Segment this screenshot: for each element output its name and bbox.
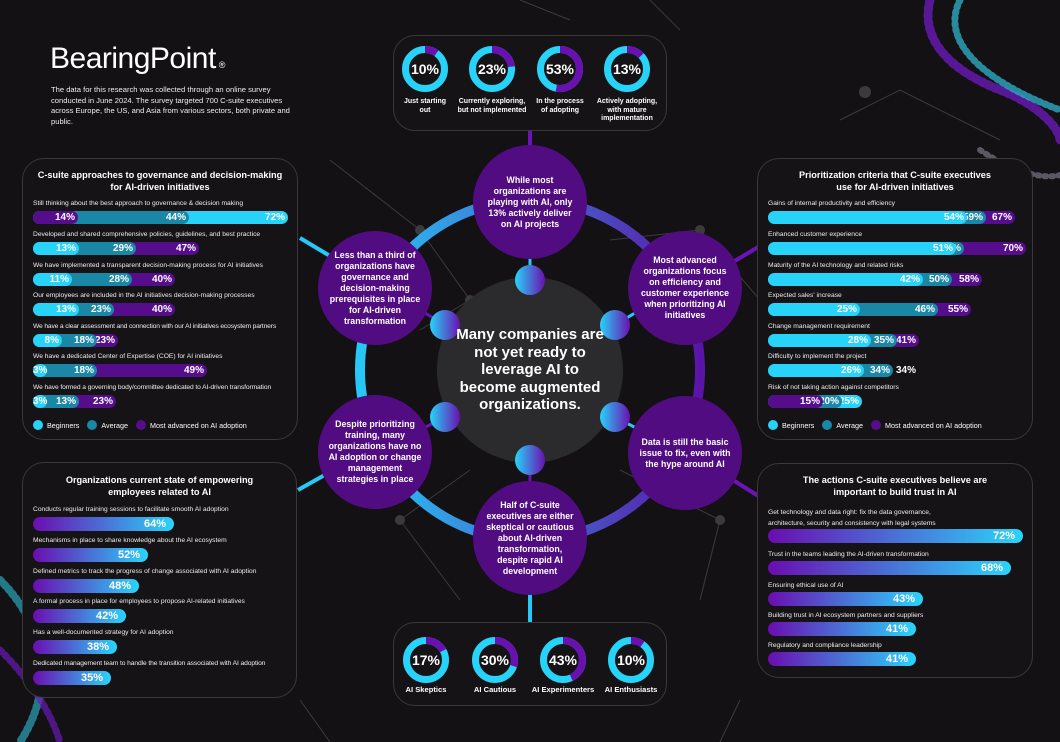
donut labels: AI Enthusiasts: [605, 685, 657, 694]
bar rows: 42%: [900, 274, 920, 285]
bar rows: Ensuring ethical use of AI: [768, 582, 843, 589]
callout: top left: Less than a third of organizations have governance and decision-making prerequisites in place for AI-driven transformation: [330, 250, 420, 326]
bar rows: Enhanced customer experience: [768, 231, 862, 238]
donut labels: but not implemented: [458, 106, 526, 114]
donut: 23%: [469, 46, 515, 92]
bar rows: We have a clear assessment and connection with our AI initiatives ecosystem partners: [33, 323, 276, 330]
bar rows: Maturity of the AI technology and related risks: [768, 262, 903, 269]
donut labels: [404, 98, 657, 122]
donut: 17%: [403, 637, 449, 683]
donut: 43%: 43%: [549, 652, 578, 668]
panel: AI attitude donuts: [393, 622, 667, 706]
legend: Beginners Average Most advanced on AI adoption: [47, 420, 247, 430]
bar rows: 46%: [915, 304, 935, 315]
donut: 10%: 10%: [411, 61, 440, 77]
bar rows: 53%: [941, 243, 961, 254]
donut labels: Actively adopting,: [597, 98, 657, 105]
callout: top: While most organizations are playing with AI, only 13% actively deliver on AI projects: [488, 174, 572, 228]
logo: BearingPoint: BearingPoint ®: [50, 42, 225, 75]
donut: 10%: 10%: [617, 652, 646, 668]
bar rows: 14%: [55, 212, 75, 223]
bar rows: 3%: [33, 365, 47, 376]
donut labels: [406, 685, 658, 694]
bar rows: Difficulty to implement the project: [768, 353, 866, 360]
legend: Beginners Average Most advanced on AI adoption: [782, 420, 982, 430]
bar rows: 28%: [848, 335, 868, 346]
bar rows: 43%: [893, 593, 915, 605]
donut labels: AI Experimenters: [532, 685, 594, 694]
bar rows: architecture, security and consistency with legal systems: [768, 520, 936, 527]
bar rows: 18%: [74, 335, 94, 346]
heading: Organizations current state of empowering: [66, 475, 253, 485]
bar rows: Trust in the teams leading the AI-driven transformation: [768, 551, 929, 558]
heading: The actions C-suite executives believe are: [803, 475, 987, 485]
bar rows: Get technology and data right: fix the data governance,: [768, 509, 931, 516]
donut: 30%: 30%: [481, 652, 510, 668]
donut: 10%: [402, 46, 448, 92]
donut: 13%: 13%: [613, 61, 642, 77]
bar rows: 34%: [896, 365, 916, 376]
heading: [38, 170, 282, 192]
bar rows: 55%: [948, 304, 968, 315]
bar rows: 68%: [981, 562, 1003, 574]
bar rows: A formal process in place for employees to propose AI-related initiatives: [33, 598, 245, 605]
bar rows: 20%: [819, 396, 839, 407]
bar rows: 58%: [959, 274, 979, 285]
bar rows: [33, 506, 266, 685]
bar rows: 72%: [265, 212, 285, 223]
heading: C-suite approaches to governance and decision-making: [38, 170, 282, 180]
bar rows: 23%: [93, 396, 113, 407]
bar rows: 59%: [963, 212, 983, 223]
panel: adoption stages donuts: [393, 35, 667, 131]
bar rows: 25%: [837, 304, 857, 315]
bar rows: 48%: [109, 580, 131, 592]
bar rows: 52%: [118, 549, 140, 561]
ring: [360, 200, 700, 540]
donut: 13%: [604, 46, 650, 92]
donut: 17%: 17%: [412, 652, 441, 668]
bar rows: 23%: [91, 304, 111, 315]
bar rows: 49%: [184, 365, 204, 376]
callout: bottom: Half of C-suite executives are either skeptical or cautious about AI-driven transformation, despite rapid AI development: [486, 500, 574, 576]
bar rows: 72%: [993, 530, 1015, 542]
center headline: Many companies are not yet ready to leverage AI to become augmented organizations.: [456, 326, 604, 413]
donut labels: implementation: [601, 115, 653, 122]
bar rows: Has a well-documented strategy for AI adoption: [33, 629, 174, 636]
bar rows: 13%: [56, 243, 76, 254]
bar rows: We have implemented a transparent decision-making process for AI initiatives: [33, 262, 263, 269]
bar rows: Developed and shared comprehensive policies, guidelines, and best practice: [33, 231, 260, 238]
bar rows: [33, 200, 288, 408]
callout: bottom left: Despite prioritizing training, many organizations have no AI adoption or change management strategies in place: [329, 419, 421, 484]
bar rows: Defined metrics to track the progress of change associated with AI adoption: [33, 568, 256, 575]
donut labels: with mature: [607, 106, 647, 114]
bar rows: 25%: [839, 396, 859, 407]
donut labels: of adopting: [541, 106, 579, 114]
bar rows: Risk of not taking action against competitors: [768, 384, 899, 391]
bar rows: We have a dedicated Center of Expertise (COE) for AI initiatives: [33, 353, 222, 360]
bar rows: 13%: [56, 396, 76, 407]
heading: employees related to AI: [108, 486, 211, 496]
bar rows: 44%: [166, 212, 186, 223]
bar rows: Expected sales' increase: [768, 292, 842, 299]
bar rows: 18%: [74, 365, 94, 376]
bar rows: 34%: [870, 365, 890, 376]
bar rows: Change management requirement: [768, 323, 870, 330]
heading: use for AI-driven initiatives: [836, 182, 954, 192]
donut: 43%: [540, 637, 586, 683]
heading: [66, 475, 253, 497]
bar rows: 41%: [886, 653, 908, 665]
donut: 53%: 53%: [546, 61, 575, 77]
bar rows: 40%: [152, 274, 172, 285]
callout: top right: Most advanced organizations focus on efficiency and customer experience when prioritizing AI initiatives: [641, 255, 729, 320]
bar rows: 64%: [144, 518, 166, 530]
bar rows: [768, 509, 1023, 666]
donut labels: Just starting: [404, 98, 446, 105]
bar rows: Mechanisms in place to share knowledge about the AI ecosystem: [33, 537, 227, 544]
panel: building trust: [757, 463, 1033, 678]
bar rows: 41%: [886, 623, 908, 635]
donut: 30%: [472, 637, 518, 683]
donut labels: AI Skeptics: [406, 685, 446, 694]
panel: prioritization criteria: [757, 158, 1033, 440]
bar rows: 38%: [87, 641, 109, 653]
connector lines: [300, 238, 330, 256]
bar rows: Conducts regular training sessions to facilitate smooth AI adoption: [33, 506, 229, 513]
donut: 23%: 23%: [478, 61, 507, 77]
bar rows: Still thinking about the best approach to governance & decision making: [33, 200, 243, 207]
bar rows: 70%: [1003, 243, 1023, 254]
bar rows: 23%: [95, 335, 115, 346]
callout: bottom right: Data is still the basic issue to fix, even with the hype around AI: [640, 436, 730, 468]
bar rows: 40%: [152, 304, 172, 315]
heading: Prioritization criteria that C-suite executives: [799, 170, 991, 180]
bar rows: 67%: [992, 212, 1012, 223]
donut labels: out: [420, 106, 430, 114]
bar rows: Building trust in AI ecosystem partners and suppliers: [768, 612, 923, 619]
donut labels: In the process: [536, 98, 584, 105]
bar rows: 41%: [896, 335, 916, 346]
heading: important to build trust in AI: [833, 486, 957, 496]
bar rows: 42%: [96, 610, 118, 622]
bar rows: [768, 200, 1026, 408]
donut labels: AI Cautious: [474, 685, 516, 694]
panel: governance: [22, 158, 298, 440]
donut: 10%: [608, 637, 654, 683]
bar rows: 15%: [800, 396, 820, 407]
bar rows: 26%: [841, 365, 861, 376]
bar rows: 13%: [56, 304, 76, 315]
intro text: The data for this research was collected through an online survey conducted in June 2024. The survey targeted 700 C-suite executives across Europe, the US, and Asia from various sectors, both private and public.: [51, 85, 290, 126]
bar rows: 35%: [874, 335, 894, 346]
donut: 53%: [537, 46, 583, 92]
bar rows: 51%: [933, 243, 953, 254]
bar rows: We have formed a governing body/committee dedicated to AI-driven transformation: [33, 384, 271, 391]
bar rows: 35%: [81, 672, 103, 684]
panel: empowering employees: [22, 462, 297, 698]
bar rows: Gains of internal productivity and efficiency: [768, 200, 895, 207]
bar rows: 3%: [33, 396, 47, 407]
bar rows: Dedicated management team to handle the transition associated with AI adoption: [33, 660, 265, 667]
bar rows: 28%: [109, 274, 129, 285]
bar rows: Regulatory and compliance leadership: [768, 642, 882, 649]
bar rows: 29%: [113, 243, 133, 254]
heading: [802, 475, 987, 497]
bar rows: 47%: [176, 243, 196, 254]
bar rows: 50%: [929, 274, 949, 285]
bar rows: 11%: [50, 274, 69, 285]
heading: for AI-driven initiatives: [110, 182, 210, 192]
heading: [799, 170, 991, 192]
bar rows: Our employees are included in the AI initiatives decision-making processes: [33, 292, 255, 299]
bar rows: 54%: [944, 212, 964, 223]
bar rows: 8%: [45, 335, 59, 346]
donut labels: Currently exploring,: [459, 98, 525, 105]
